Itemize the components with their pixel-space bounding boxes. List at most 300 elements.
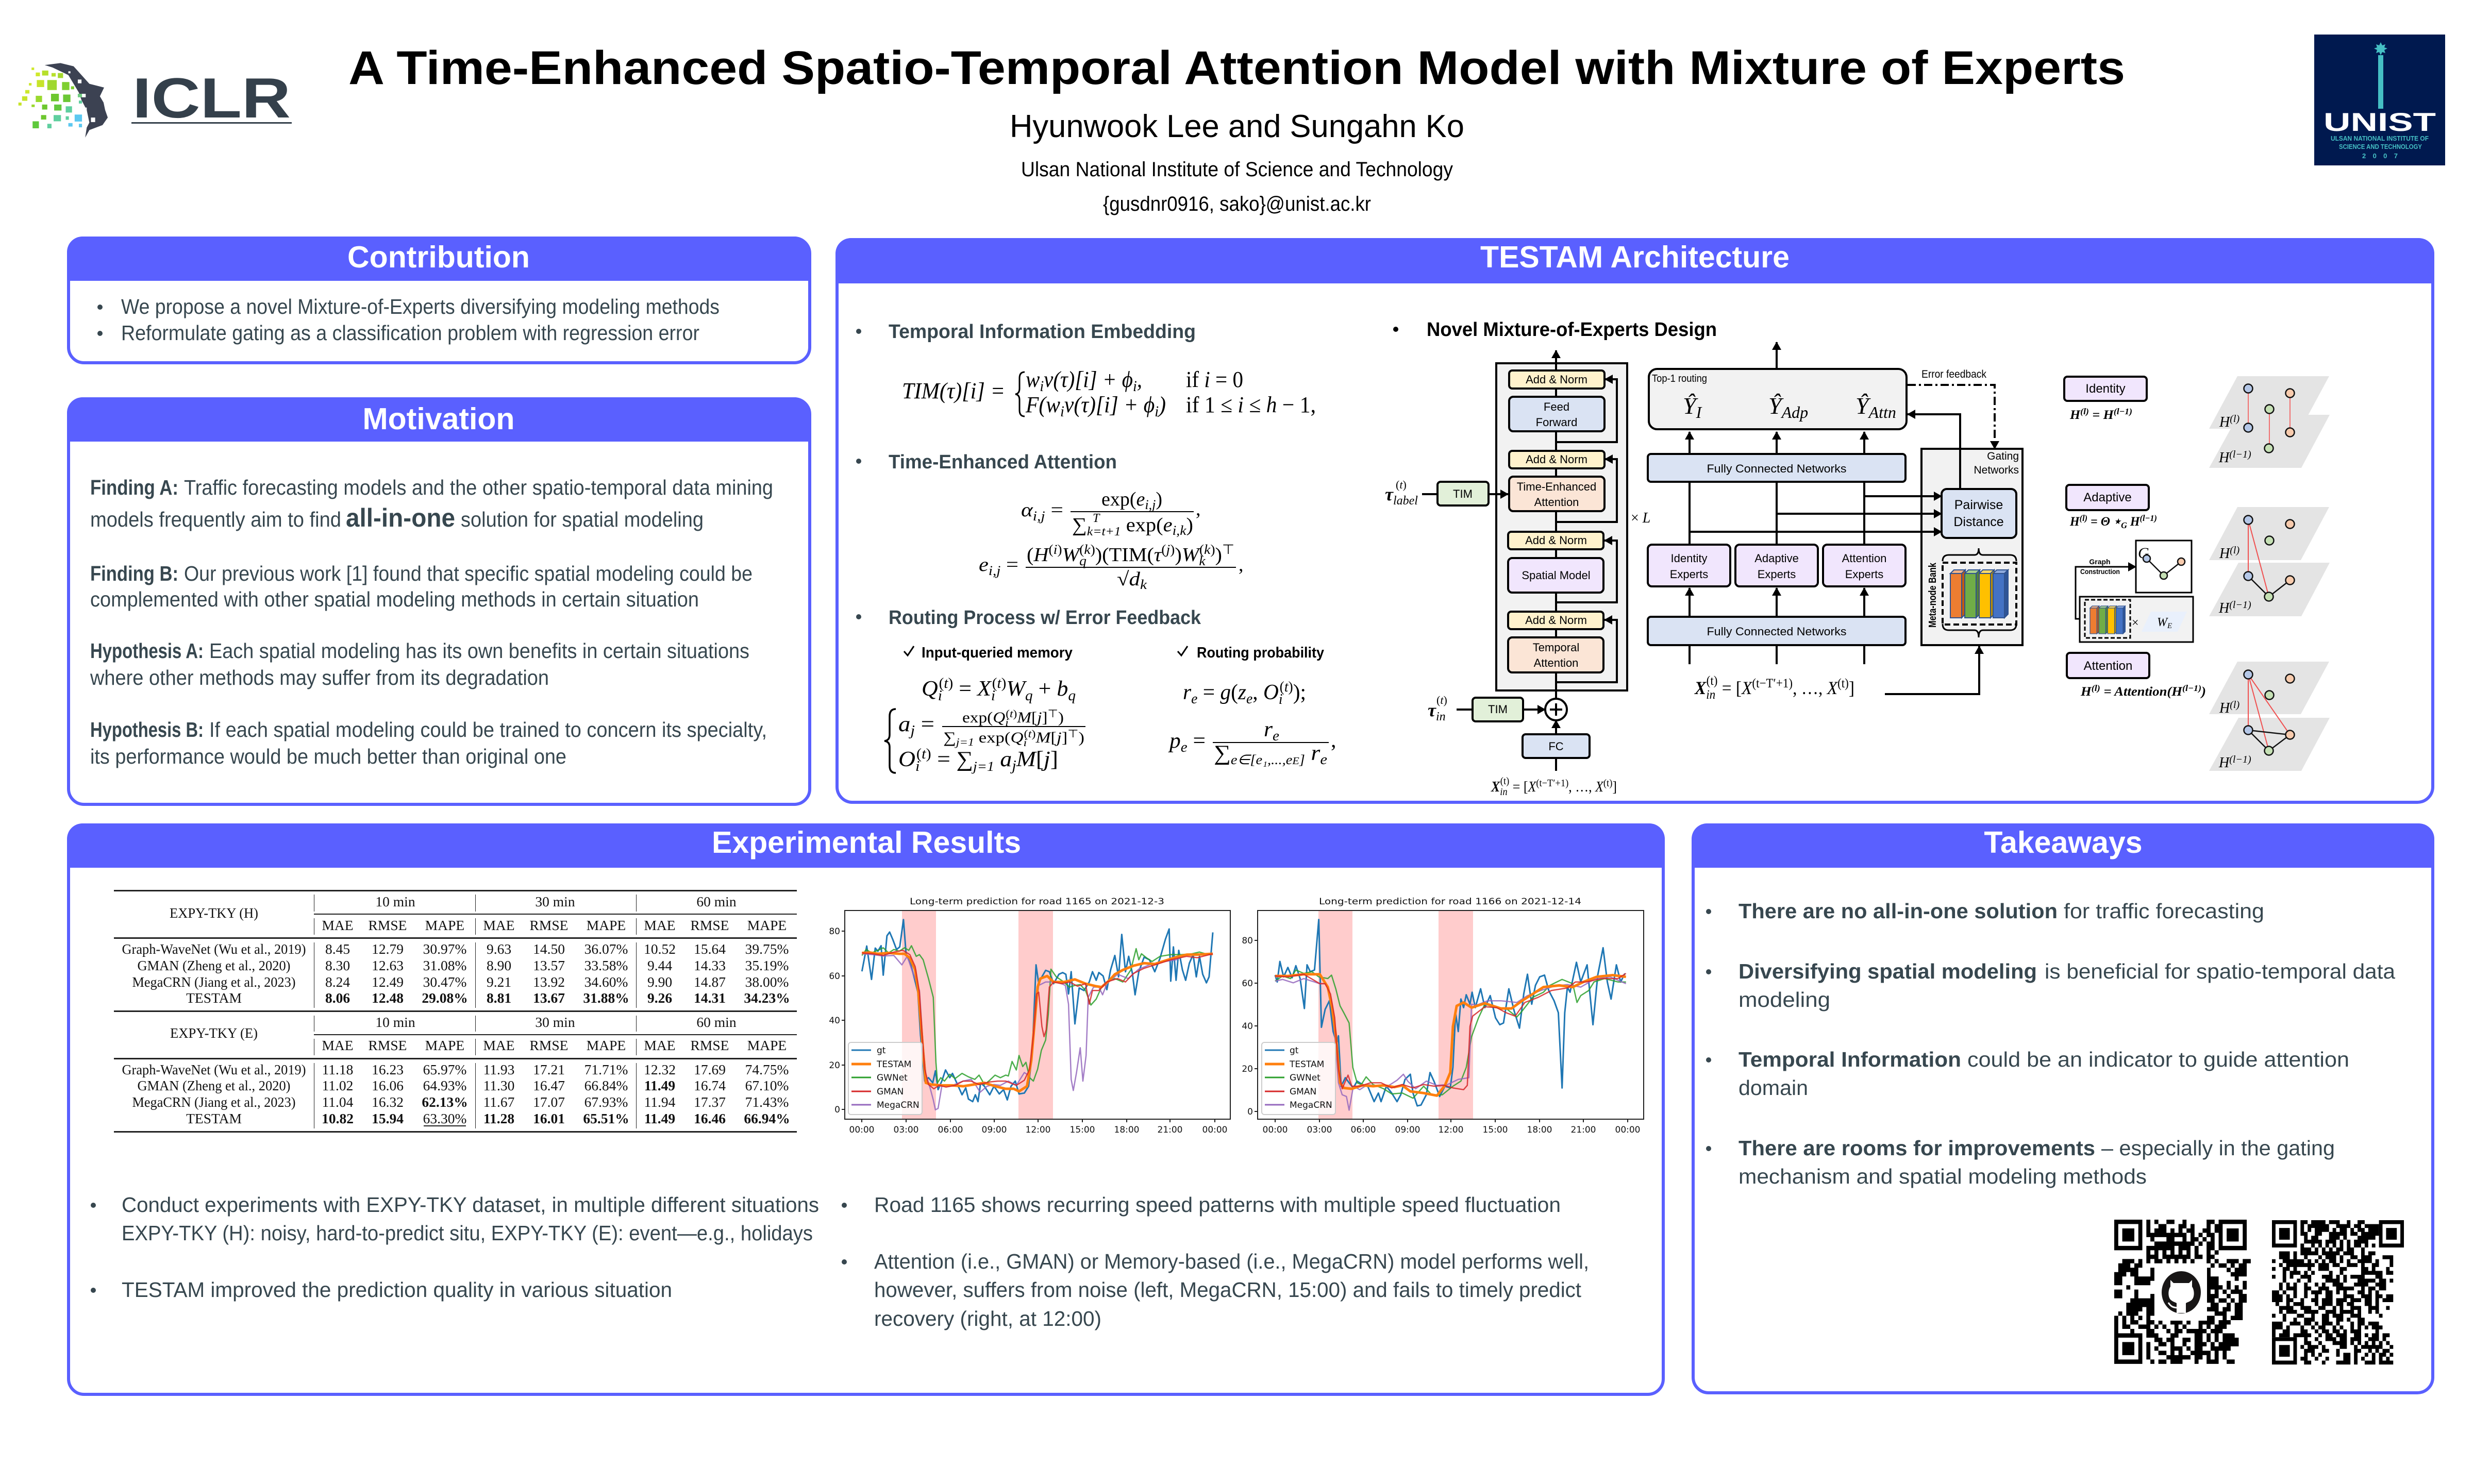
takeaway 3 — [1706, 1048, 2349, 1100]
formula: input sequence: (t) — [1837, 677, 1849, 690]
box: temporal attention: Temporal — [1533, 641, 1579, 654]
chart: road 1166: 21:00 — [1571, 1125, 1596, 1135]
box: FCN top: Fully Connected Networks — [1707, 462, 1846, 475]
table: results: TESTAM — [186, 1110, 242, 1126]
table: results: 16.23 — [372, 1061, 404, 1077]
chart: road 1165: 12:00 — [1026, 1125, 1050, 1135]
panel: motivation — [67, 397, 810, 804]
legend: MegaCRN — [877, 1100, 920, 1110]
finding B: Finding B: — [90, 562, 178, 585]
table: results: 17.07 — [533, 1094, 565, 1110]
table: results: 66.84% — [584, 1077, 628, 1093]
logo: UNIST: ULSAN NATIONAL INSTITUTE OF — [2331, 134, 2429, 142]
equations: memory query: = — [953, 677, 977, 701]
chart: road 1166: 12:00 — [1438, 1125, 1464, 1135]
table: results: 38.00% — [745, 974, 789, 990]
equations: memory query — [884, 676, 1085, 774]
takeaway 3: Temporal Information — [1739, 1048, 1961, 1071]
equation: TIM: i — [1060, 403, 1064, 420]
equations: routing probability: r — [1183, 681, 1192, 704]
box: add & norm — [1508, 612, 1603, 629]
table: results: 33.58% — [584, 957, 628, 973]
equations: routing probability: e — [1181, 739, 1188, 755]
table: results: MAE — [483, 1037, 515, 1053]
table: results: MAPE — [587, 1037, 626, 1053]
planes: attention: (l−1) — [2229, 754, 2251, 765]
box: top-1 routing outputs: Adp — [1781, 403, 1808, 421]
box: add & norm: Add & Norm — [1526, 453, 1587, 466]
equations: routing probability: r — [1311, 741, 1320, 765]
chart: road 1165: 09:00 — [981, 1125, 1007, 1135]
box: time-enhanced attention: Time-Enhanced — [1517, 480, 1596, 493]
multiplier: × L — [1631, 510, 1650, 526]
equations: memory query: i — [991, 688, 995, 704]
chart: road 1165: 18:00 — [1114, 1125, 1139, 1135]
equations: memory query: exp( — [974, 729, 1010, 746]
hypothesis B: Hypothesis B: — [90, 718, 204, 741]
table: results: 17.69 — [694, 1061, 726, 1077]
results notes: left: EXPY-TKY (H): noisy, hard-to-predict situ, EXPY-TKY (E): event—e.g., holidays — [122, 1221, 813, 1245]
hypothesis A: Each spatial modeling has its own benefits in certain situations — [209, 639, 749, 663]
box: add & norm: Add & Norm — [1525, 614, 1587, 627]
box: adaptive experts: Adaptive — [1754, 552, 1799, 565]
time-enhanced attention — [856, 451, 1243, 592]
legend: gt — [1290, 1045, 1299, 1056]
planes: identity: H — [2219, 450, 2229, 466]
chart: road 1165: 40 — [829, 1016, 840, 1026]
table: results: 8.30 — [325, 957, 350, 973]
sub-heading: input-queried memory: Input-queried memory — [922, 645, 1073, 661]
table: results: 74.75% — [745, 1061, 789, 1077]
planes: attention: (l) — [2230, 699, 2239, 711]
planes: identity: (l) — [2230, 413, 2239, 425]
equation: TIM: i — [1040, 378, 1044, 395]
table: results: 13.67 — [533, 990, 565, 1006]
chart: road 1165: 60 — [829, 971, 840, 982]
equations: memory query: Q — [1010, 729, 1024, 746]
table: results: MAPE — [747, 1037, 787, 1053]
table: results: 71.71% — [584, 1061, 628, 1077]
table: results: MAE — [644, 1037, 676, 1053]
table: results: 66.94% — [744, 1110, 790, 1126]
table: results: 11.04 — [322, 1094, 354, 1110]
legend: GWNet — [877, 1073, 908, 1083]
formula: input sequence: = [ — [1717, 678, 1742, 698]
box: add & norm: Add & Norm — [1526, 373, 1587, 386]
equations: memory query: O — [898, 748, 915, 771]
table: results: Graph-WaveNet (Wu et al., 2019) — [122, 941, 306, 957]
box: top-1 routing outputs: I — [1696, 403, 1702, 421]
table: results: MAPE — [747, 917, 787, 933]
formula: X in: X — [1528, 779, 1536, 795]
finding B: Our previous work [1] found that specific spatial modeling could be — [184, 562, 753, 585]
box: top-1 routing outputs: Ŷ — [1768, 393, 1782, 419]
equations: routing probability: (t) — [1280, 679, 1293, 695]
contribution bullets: Reformulate gating as a classification problem with regression error — [121, 321, 699, 345]
formula: X in: (t) — [1603, 778, 1612, 789]
equation: TIM: if 1 ≤ i ≤ h − 1, — [1186, 392, 1316, 417]
equations: memory query: M — [1035, 729, 1052, 746]
equations: memory query: exp(Q — [962, 709, 1004, 726]
box: time-enhanced attention — [1509, 477, 1604, 511]
panel: experimental results — [67, 823, 1665, 1394]
chart: road 1165: 03:00 — [894, 1125, 918, 1135]
hypothesis A — [90, 639, 749, 689]
chart: road 1166 — [1242, 897, 1644, 1135]
box: add & norm: Add & Norm — [1525, 534, 1587, 547]
takeaway 1: for traffic forecasting — [2064, 899, 2264, 923]
table: results: 34.60% — [584, 974, 628, 990]
table: results: GMAN (Zheng et al., 2020) — [137, 1077, 291, 1093]
equations: memory query: j=1 — [972, 759, 994, 774]
expert details: identity — [2064, 376, 2330, 468]
graph construction: W — [2157, 616, 2167, 629]
equations: memory query: b — [1057, 677, 1068, 701]
equation: attention score: (k) — [1199, 542, 1215, 557]
chart: road 1166: 06:00 — [1350, 1125, 1376, 1135]
input: tau in and TIM — [1428, 694, 1590, 771]
equation: attention score: k=t+1 — [1087, 525, 1121, 538]
chart: road 1166: 09:00 — [1395, 1125, 1420, 1135]
box: identity experts: Identity — [1671, 552, 1707, 565]
table: results: 17.21 — [533, 1061, 565, 1077]
equation: attention score: W — [1062, 544, 1081, 566]
meta-node bank: Meta-node Bank — [1927, 562, 1938, 628]
table: results: MAPE — [425, 917, 464, 933]
table: results: 11.94 — [644, 1094, 676, 1110]
equation: attention score: e — [1163, 514, 1173, 536]
sub-heading: routing probability: Routing probability — [1197, 645, 1324, 661]
expert details: adaptive: H — [2070, 515, 2080, 529]
table: results: 12.63 — [372, 957, 404, 973]
title: A Time-Enhanced Spatio-Temporal Attention Model with Mixture of Experts — [348, 42, 2125, 94]
box: adaptive experts: Experts — [1758, 568, 1796, 581]
table: results: RMSE — [530, 917, 568, 933]
chart: road 1166: 40 — [1242, 1021, 1253, 1032]
equation: attention score: T — [1093, 512, 1100, 525]
table: results: MAE — [644, 917, 676, 933]
table: results: 11.02 — [322, 1077, 353, 1093]
input: tau in and TIM: in — [1436, 710, 1446, 723]
equation: TIM — [902, 367, 1316, 420]
equation: TIM: i — [1155, 403, 1159, 420]
takeaway 2: modeling — [1739, 988, 1830, 1011]
table: results: Graph-WaveNet (Wu et al., 2019) — [122, 1061, 306, 1077]
table: results: 11.67 — [483, 1094, 514, 1110]
planes: attention: H — [2219, 755, 2229, 771]
input: tau in and TIM: FC — [1548, 740, 1564, 753]
equations: memory query: ∑ — [943, 729, 954, 746]
table: results: 30.47% — [423, 974, 466, 990]
routing process: Routing Process w/ Error Feedback — [889, 607, 1201, 629]
table: results: 35.19% — [745, 957, 789, 973]
equation: attention score: exp(e — [1101, 488, 1145, 510]
equations: memory query: ) — [1058, 709, 1064, 726]
expert details: identity: = H — [2089, 408, 2114, 422]
logo: ICLR — [19, 63, 292, 138]
results notes: left: Conduct experiments with EXPY-TKY dataset, in multiple different situations — [122, 1193, 819, 1217]
equation: attention score: ⊤ — [1222, 542, 1234, 557]
equations: memory query: M — [1016, 748, 1037, 771]
formula: input sequence: X — [1826, 678, 1838, 698]
hypothesis A: Hypothesis A: — [90, 639, 204, 663]
equation: attention score: (i) — [1049, 542, 1062, 557]
formula: X in: ] — [1612, 779, 1617, 795]
results notes: left — [91, 1193, 819, 1302]
equation: attention score: √d — [1117, 568, 1139, 590]
table: results: 60 min — [696, 1014, 737, 1030]
table: results: 11.93 — [483, 1061, 514, 1077]
table: results: 8.81 — [487, 990, 511, 1006]
table: results: 10.52 — [644, 941, 676, 957]
hypothesis B: its performance would be much better than original one — [90, 745, 566, 768]
table: results: 14.50 — [533, 941, 565, 957]
table: results: MAE — [322, 1037, 354, 1053]
equation: TIM: TIM(τ)[i] = — [902, 378, 1005, 403]
diagram: TESTAM encoder stack — [1385, 350, 1650, 798]
table: results: GMAN (Zheng et al., 2020) — [137, 957, 291, 973]
box: temporal attention: Attention — [1534, 656, 1578, 669]
planes: identity — [2209, 376, 2330, 468]
table: results: 15.94 — [372, 1110, 404, 1126]
expert details: identity: H — [2070, 408, 2080, 422]
table: results: 8.90 — [487, 957, 511, 973]
logo: UNIST — [2314, 35, 2445, 165]
equation: attention score: )(TIM( — [1095, 544, 1154, 566]
feedback: error: Error feedback — [1921, 368, 1986, 380]
graph construction: Construction — [2080, 567, 2120, 576]
chart: road 1166: 0 — [1247, 1107, 1253, 1117]
table: results: 11.30 — [483, 1077, 514, 1093]
table: results: 10.82 — [322, 1110, 354, 1126]
table: results: 64.93% — [423, 1077, 466, 1093]
formula: input sequence: X — [1694, 678, 1707, 698]
chart: road 1166: 60 — [1242, 979, 1253, 989]
results notes: right — [842, 1193, 1589, 1330]
equations: memory query: i — [1024, 736, 1027, 749]
equation: attention score: i,j — [1033, 509, 1045, 524]
table: results: 16.47 — [533, 1077, 565, 1093]
table: results: 14.31 — [694, 990, 726, 1006]
planes: adaptive — [2209, 507, 2330, 616]
equation: attention score: e — [979, 554, 988, 576]
time-enhanced attention: Time-Enhanced Attention — [889, 451, 1117, 473]
equations: routing probability — [1168, 679, 1336, 768]
expert details: adaptive: H — [2127, 515, 2141, 529]
formula: input sequence: in — [1706, 688, 1715, 702]
heading: contribution: Contribution — [347, 240, 530, 274]
chart: road 1165: 21:00 — [1158, 1125, 1182, 1135]
finding A: Finding A: — [90, 476, 178, 499]
legend: GMAN — [1290, 1087, 1316, 1097]
table: results: 13.92 — [533, 974, 565, 990]
equations: routing probability: , — [1252, 681, 1263, 704]
takeaway 1: There are no all-in-one solution — [1739, 899, 2058, 923]
heading: motivation: Motivation — [363, 402, 514, 436]
equation: attention score: α — [1021, 499, 1031, 521]
formula: X in: (t) — [1500, 775, 1509, 787]
table: results: 12.32 — [644, 1061, 676, 1077]
finding B: complemented with other spatial modeling methods in certain situation — [90, 587, 699, 611]
input: tau in and TIM: TIM — [1488, 703, 1508, 716]
table: results: 9.63 — [487, 941, 511, 957]
equations: routing probability: e — [1320, 752, 1327, 768]
hypothesis B: If each spatial modeling could be trained to concern its specialty, — [209, 718, 767, 741]
expert details: adaptive: G — [2121, 520, 2128, 530]
equations: routing probability: e∈[e₁,...,e E] — [1231, 752, 1305, 767]
results notes: right: Road 1165 shows recurring speed patterns with multiple speed fluctuation — [874, 1193, 1561, 1217]
box: spatial model: Spatial Model — [1522, 569, 1591, 582]
feedback: error — [1908, 368, 1995, 449]
equation: attention score: (k) — [1079, 542, 1095, 557]
equations: routing probability: = — [1188, 729, 1206, 753]
logo: UNIST: SCIENCE AND TECHNOLOGY — [2339, 143, 2422, 150]
finding A: solution for spatial modeling — [461, 508, 704, 531]
box: spatial model — [1508, 558, 1603, 593]
expert details: attention: Attention — [2084, 659, 2132, 673]
equation: attention score: k — [1199, 553, 1206, 568]
chart: road 1165: Long-term prediction for road 1165 on 2021-12-3 — [910, 897, 1164, 907]
equations: memory query: = — [915, 713, 934, 736]
equation: attention score: i,j — [1145, 497, 1156, 512]
box: add & norm — [1509, 451, 1604, 468]
equation: attention score: (H — [1027, 544, 1048, 566]
table: results: 9.90 — [647, 974, 672, 990]
finding A: Traffic forecasting models and the other spatio-temporal data mining — [184, 476, 773, 499]
equations: memory query: ⊤ — [1067, 728, 1078, 740]
equation: attention score: τ — [1154, 544, 1162, 566]
graph construction — [2076, 541, 2193, 642]
equation: attention score: ) — [1186, 514, 1193, 536]
legend: MegaCRN — [1290, 1100, 1332, 1110]
expert details: adaptive: (l) — [2080, 513, 2087, 523]
table: results: 65.97% — [423, 1061, 466, 1077]
diagram: mixture of experts — [1648, 342, 2022, 702]
takeaway 2 — [1706, 959, 2395, 1011]
table: results: 62.13% — [422, 1094, 468, 1110]
chart: road 1166: 80 — [1242, 936, 1253, 946]
equation: attention score: ∑ — [1072, 514, 1086, 536]
box: attention experts — [1823, 545, 1905, 586]
expert details: attention: H — [2081, 685, 2091, 699]
planes: attention — [2209, 662, 2330, 771]
box: FCN bottom: Fully Connected Networks — [1707, 625, 1846, 638]
finding A: all-in-one — [346, 503, 455, 532]
table: results: MegaCRN (Jiang et al., 2023) — [132, 974, 296, 990]
table: results: MAPE — [587, 917, 626, 933]
equations: routing probability: r — [1264, 718, 1273, 741]
equation: attention score: = — [1045, 499, 1063, 521]
equations: memory query: a — [1000, 748, 1012, 771]
box: attention experts: Experts — [1845, 568, 1883, 581]
equation: TIM: i — [1133, 378, 1137, 395]
expert details: adaptive — [2066, 485, 2330, 642]
input: tau in and TIM: (t) — [1436, 694, 1447, 706]
input: tau label and TIM: label — [1393, 494, 1418, 508]
equations: memory query: i — [1005, 716, 1009, 729]
table: results: RMSE — [369, 1037, 407, 1053]
box: gating networks — [1690, 414, 2022, 645]
table: results: RMSE — [530, 1037, 568, 1053]
table: results: 67.10% — [745, 1077, 789, 1093]
equation: TIM: v(τ)[i] + ϕ — [1044, 367, 1133, 392]
equation: TIM: , — [1137, 367, 1142, 392]
table: results — [114, 890, 797, 1133]
table: results: 16.01 — [533, 1110, 565, 1126]
equation: attention score: W — [1182, 544, 1201, 566]
equation: attention score: i,k — [1173, 523, 1186, 538]
takeaway 2: Diversifying spatial modeling — [1739, 959, 2037, 983]
equations: routing probability: i — [1279, 692, 1283, 707]
legend: GWNet — [1290, 1073, 1320, 1083]
graph construction: Graph — [2089, 558, 2111, 566]
chart: road 1165: 06:00 — [938, 1125, 963, 1135]
table: results: 30.97% — [423, 941, 466, 957]
meta-node bank — [1927, 548, 2016, 637]
heading: takeaways: Takeaways — [1984, 825, 2143, 859]
input: tau label and TIM: (t) — [1396, 478, 1407, 491]
table: results: 31.08% — [423, 957, 466, 973]
equations: memory query: q — [1025, 688, 1033, 704]
formula: X in: X — [1595, 779, 1604, 795]
logo: ICLR: ICLR — [132, 66, 291, 130]
table: results: MAE — [483, 917, 515, 933]
box: time-enhanced attention: Attention — [1534, 496, 1579, 509]
input: tau label and TIM — [1385, 478, 1508, 508]
box: top-1 routing outputs: Attn — [1868, 403, 1896, 421]
panel: TESTAM architecture — [835, 238, 2434, 802]
legend: GMAN — [877, 1087, 904, 1097]
table: results: MAPE — [425, 1037, 464, 1053]
equation: attention score: k — [1140, 577, 1147, 592]
planes: identity: (l−1) — [2229, 449, 2251, 460]
equations: routing probability: e — [1273, 728, 1279, 744]
takeaway 4 — [1706, 1136, 2335, 1188]
routing process — [856, 607, 1336, 774]
formula: X in: = [ — [1509, 779, 1528, 795]
equations: memory query: W — [1006, 677, 1027, 701]
formula: X in: (t−T′+1) — [1536, 778, 1568, 789]
box: add & norm — [1509, 370, 1604, 389]
table: results: TESTAM — [186, 990, 242, 1006]
box: identity experts — [1648, 545, 1730, 586]
panel: takeaways — [1692, 823, 2434, 1393]
box: temporal attention — [1508, 637, 1603, 672]
equations: memory query: = ∑ — [931, 748, 973, 771]
box: top-1 routing outputs: Ŷ — [1683, 393, 1696, 419]
chart: road 1166: 20 — [1242, 1064, 1253, 1074]
box: identity experts: Experts — [1670, 568, 1708, 581]
affiliation: Ulsan National Institute of Science and Technology — [1021, 158, 1453, 181]
table: results: 8.45 — [325, 941, 350, 957]
expert details: identity: (l−1) — [2114, 407, 2132, 416]
equations: routing probability: ); — [1293, 681, 1306, 704]
table: results: 36.07% — [584, 941, 628, 957]
formula: input sequence: , …, — [1793, 678, 1827, 698]
equations: routing probability: e — [1191, 691, 1197, 707]
table: results: 14.33 — [694, 957, 726, 973]
equation: TIM: w — [1026, 367, 1041, 392]
contribution bullets — [97, 295, 720, 345]
table: results: 8.06 — [325, 990, 350, 1006]
temporal information embedding: Temporal Information Embedding — [889, 321, 1196, 343]
equations: memory query: q — [1068, 688, 1076, 704]
equations: memory query: (t) — [916, 746, 931, 762]
chart: road 1166: 00:00 — [1615, 1125, 1640, 1135]
chart: road 1166: 15:00 — [1482, 1125, 1508, 1135]
planes: attention: H — [2219, 700, 2230, 716]
chart: road 1166: 18:00 — [1527, 1125, 1552, 1135]
